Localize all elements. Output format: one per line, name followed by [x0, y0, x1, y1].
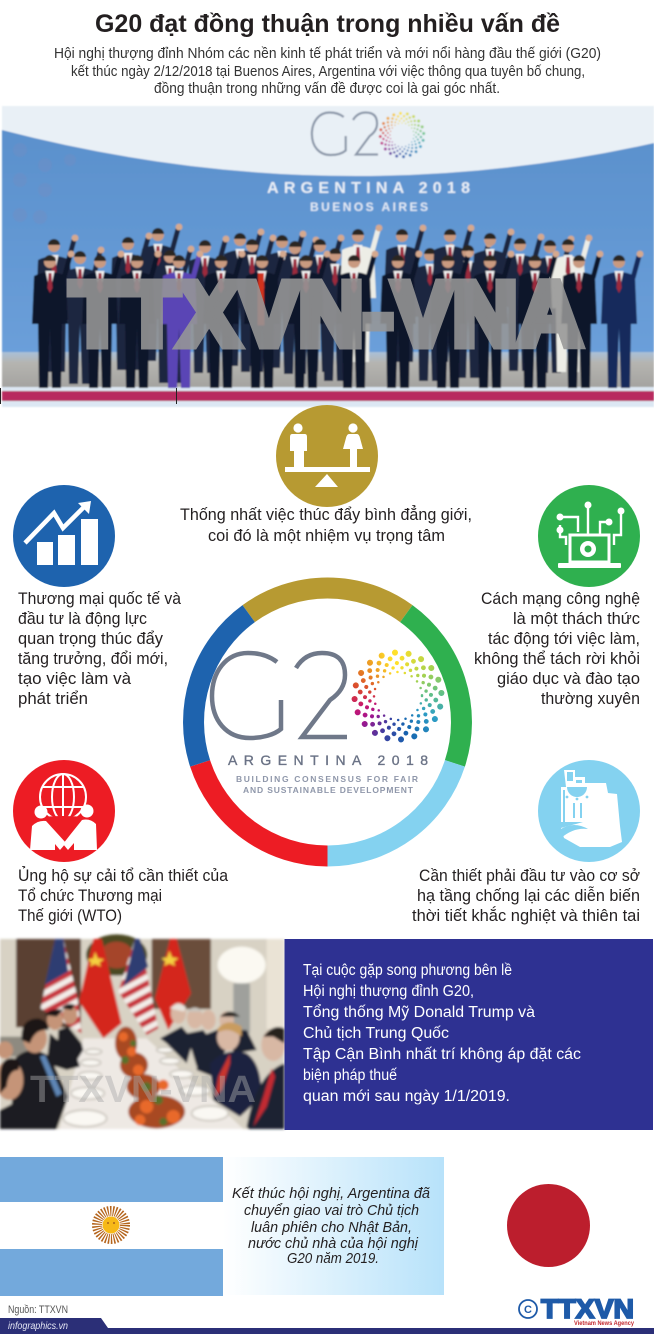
photo: G20 leaders group photo — [0, 106, 654, 407]
intro text: đồng thuận trong những vấn đề được coi là gai góc nhất. — [154, 80, 500, 97]
icon: WTO globe and handshake — [13, 760, 115, 862]
panel: bilateral meeting: Tập Cận Bình nhất trí không áp đặt các — [303, 1046, 581, 1063]
text: WTO reform: Ủng hộ sự cải tổ cần thiết của — [18, 866, 228, 885]
center ring — [194, 588, 461, 856]
icon: infrastructure city — [538, 760, 640, 862]
center G20 logo — [212, 646, 448, 795]
panel: handover to Japan: nước chủ nhà của hội nghị — [248, 1236, 419, 1252]
icon: technology laptop circuit — [538, 485, 640, 587]
text: industrial revolution: giáo dục và đào tạo — [497, 669, 640, 688]
source: Nguồn: TTXVN — [8, 1304, 68, 1316]
banner caption: ARGENTINA 2018 — [267, 180, 470, 197]
text: industrial revolution: là một thách thức — [513, 609, 640, 628]
ring segment: green — [406, 614, 461, 763]
text: industrial revolution: không thể tách rời khỏi — [474, 649, 640, 668]
panel: bilateral meeting: Hội nghị thượng đỉnh G20, — [303, 983, 474, 1000]
watermark: TTXVN-VNA — [70, 265, 582, 365]
text: infrastructure: Cần thiết phải đầu tư vào cơ sở — [419, 866, 640, 885]
panel: bilateral meeting: Chủ tịch Trung Quốc — [303, 1025, 449, 1042]
flowers — [115, 1027, 185, 1128]
panel: handover to Japan — [223, 1157, 444, 1295]
center G20 logo: BUILDING CONSENSUS FOR FAIR — [236, 774, 418, 784]
photo: G20 leaders group photo: BUENOS AIRES — [310, 200, 428, 214]
flag: Argentina — [0, 1157, 223, 1296]
text: trade and investment: Thương mại quốc tế và — [18, 589, 181, 608]
text: infrastructure — [412, 866, 640, 925]
figures in light dress — [340, 225, 592, 372]
footer bar: infographics.vn — [8, 1321, 68, 1332]
icon: trade growth chart — [13, 485, 115, 587]
panel: bilateral meeting: biện pháp thuế — [303, 1067, 397, 1084]
intro text: kết thúc ngày 2/12/2018 tại Buenos Aires, Argentina với việc thông qua tuyên bố chung, — [71, 63, 585, 80]
intro text — [54, 45, 601, 97]
panel: handover to Japan: Kết thúc hội nghị, Argentina đã — [232, 1186, 430, 1202]
text: WTO reform: Thế giới (WTO) — [18, 906, 122, 925]
ring segment: gold — [249, 588, 406, 614]
panel: bilateral meeting: Tổng thống Mỹ Donald Trump và — [303, 1004, 535, 1021]
logo: TTXVN: C — [524, 1304, 532, 1316]
center G20 logo: ARGENTINA 2018 — [228, 752, 428, 768]
panel: handover to Japan: G20 năm 2019. — [287, 1251, 379, 1267]
panel: bilateral meeting: quan mới sau ngày 1/1/2019. — [303, 1088, 510, 1105]
text: trade and investment: tăng trưởng, đổi mới, — [18, 649, 168, 668]
logo: TTXVN — [519, 1294, 634, 1327]
text: infrastructure: hạ tầng chống lại các diễn biến — [417, 886, 640, 905]
banner G20 logo — [312, 112, 378, 155]
text: industrial revolution: Cách mạng công nghệ — [481, 589, 640, 608]
text: industrial revolution: tác động tới việc làm, — [488, 629, 640, 648]
panel: handover to Japan: luân phiên cho Nhật Bản, — [251, 1220, 412, 1236]
icon: gender equality scale — [276, 405, 378, 507]
table — [59, 1038, 243, 1129]
footer bar — [0, 1318, 654, 1334]
text: gender equality — [180, 505, 472, 545]
flag: Japan — [507, 1184, 590, 1267]
front row — [32, 251, 603, 388]
text: industrial revolution: thường xuyên — [541, 689, 640, 708]
photo: US-China bilateral dinner — [0, 934, 285, 1129]
text: infrastructure: thời tiết khắc nghiệt và thiên tai — [412, 906, 640, 925]
intro text: Hội nghị thượng đỉnh Nhóm các nền kinh tế phát triển và mới nổi hàng đầu thế giới (G20) — [54, 45, 601, 62]
logo: TTXVN: TTXVN — [541, 1294, 634, 1324]
text: WTO reform — [18, 866, 228, 925]
text: gender equality: coi đó là một nhiệm vụ trọng tâm — [208, 526, 445, 545]
ring segment: red — [200, 763, 328, 856]
panel: handover to Japan: chuyển giao vai trò Chủ tịch — [244, 1203, 419, 1219]
ring segment: light blue — [328, 763, 455, 856]
text: trade and investment: quan trọng thúc đẩy — [18, 629, 163, 648]
text: industrial revolution — [474, 589, 640, 708]
text: trade and investment: phát triển — [18, 689, 88, 708]
text: trade and investment: tạo việc làm và — [18, 669, 132, 688]
title: G20 đạt đồng thuận trong nhiều vấn đề — [95, 10, 560, 38]
people left — [0, 1027, 83, 1129]
text: trade and investment: đầu tư là động lực — [18, 609, 147, 628]
panel: bilateral meeting — [284, 939, 653, 1130]
ring segment: blue — [194, 614, 249, 763]
logo: TTXVN: Vietnam News Agency — [574, 1320, 634, 1327]
watermark: TTXVN-VNA — [30, 1069, 256, 1111]
text: trade and investment — [18, 589, 181, 708]
text: gender equality: Thống nhất việc thúc đẩy bình đẳng giới, — [180, 505, 472, 524]
panel: bilateral meeting: Tại cuộc gặp song phương bên lề — [303, 962, 512, 979]
logo rosette — [352, 650, 444, 742]
sun of May — [97, 1211, 125, 1239]
back row — [36, 224, 574, 384]
text: WTO reform: Tổ chức Thương mại — [18, 886, 162, 905]
center G20 logo: AND SUSTAINABLE DEVELOPMENT — [243, 785, 414, 795]
people right — [160, 1027, 257, 1077]
